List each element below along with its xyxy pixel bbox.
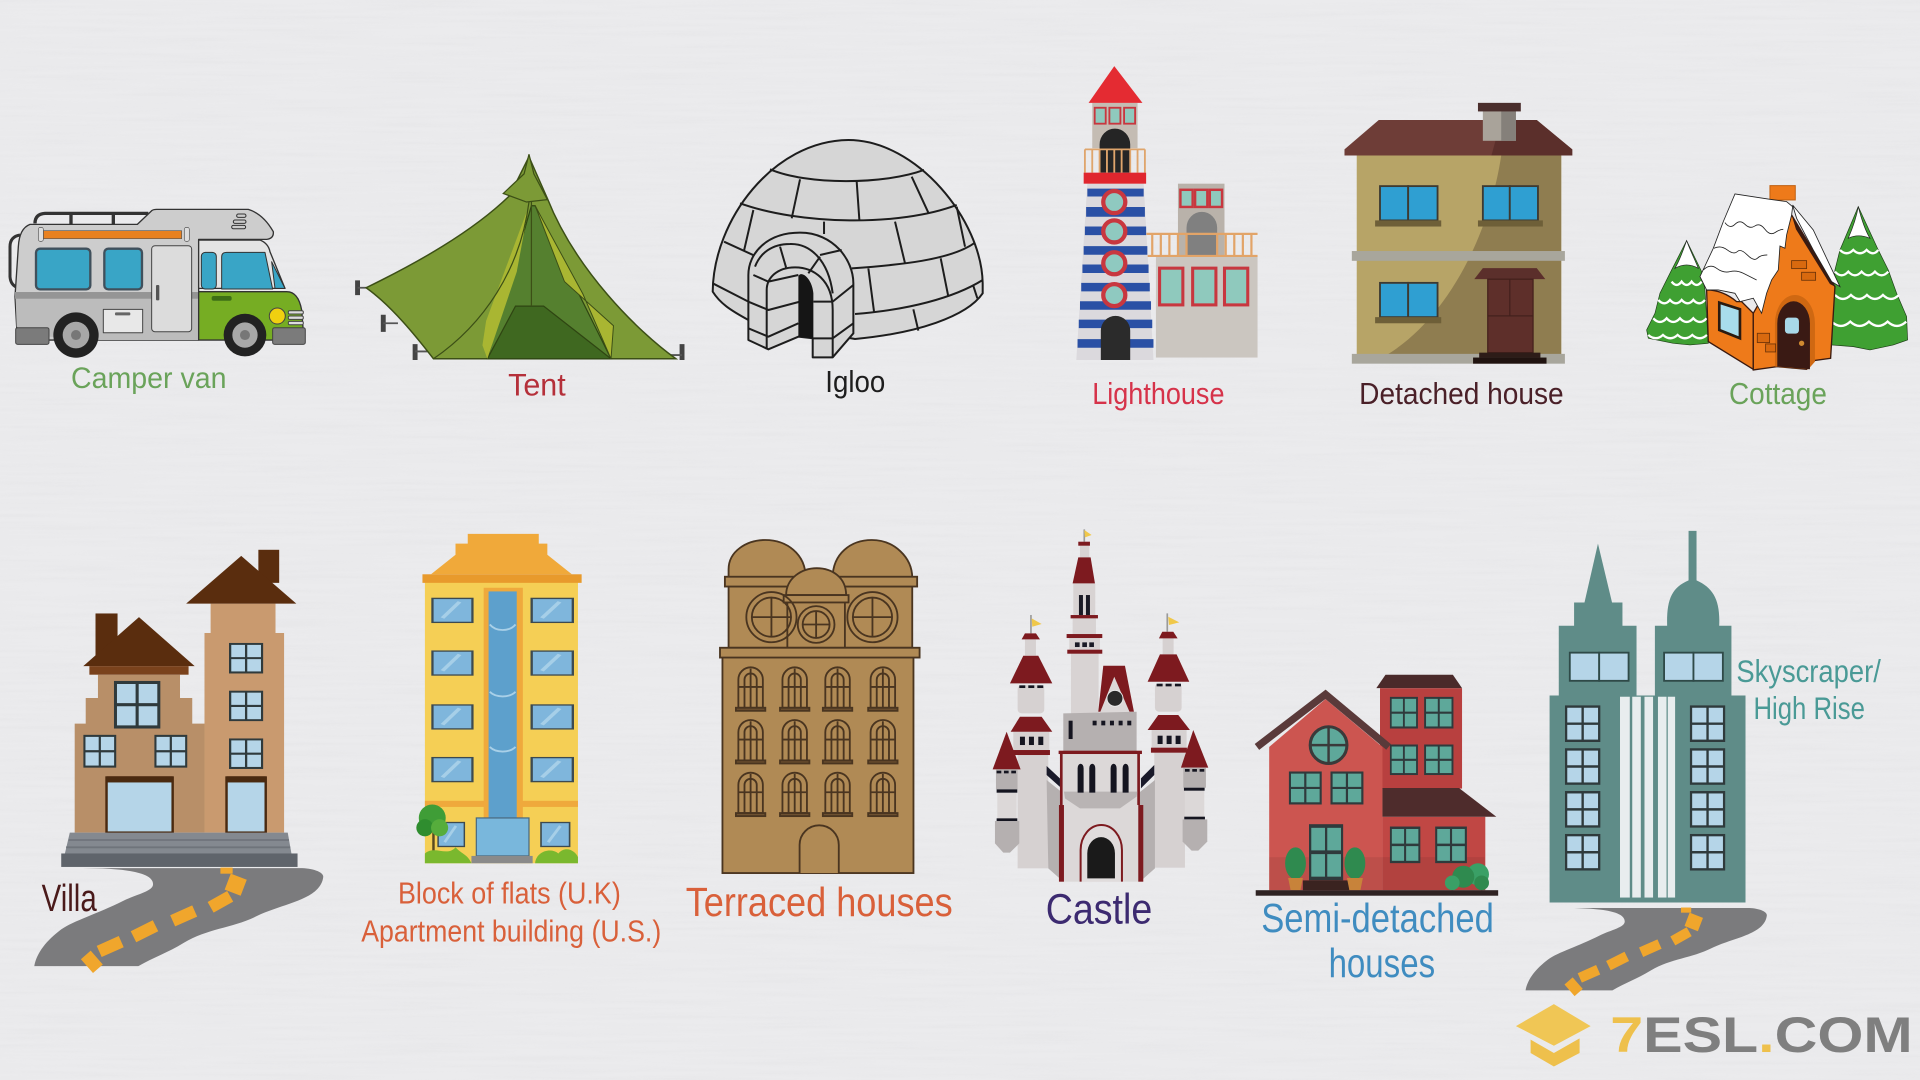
label: cottage: Cottage	[1729, 377, 1827, 411]
icon: castle	[993, 529, 1208, 882]
icon: camper van	[10, 209, 305, 358]
label: detached house: Detached house	[1359, 377, 1564, 411]
label: terraced houses: Terraced houses	[686, 879, 953, 925]
icon: lighthouse	[1076, 66, 1258, 360]
label: semi-detached houses: houses	[1329, 940, 1435, 986]
icon: terraced houses	[720, 540, 920, 873]
label: semi-detached houses: Semi-detached	[1261, 895, 1494, 941]
panel: detached house	[1344, 103, 1572, 411]
icon: graduation cap	[1516, 1004, 1591, 1067]
label: block of flats: Block of flats (U.K)	[398, 877, 621, 911]
panel: tent	[358, 154, 682, 403]
label: block of flats	[361, 877, 661, 949]
icon: skyscraper	[1526, 531, 1767, 990]
panel: skyscraper	[1526, 531, 1881, 990]
label: semi-detached houses	[1261, 895, 1494, 986]
panel: semi-detached houses	[1256, 675, 1498, 986]
panel: block of flats	[361, 534, 661, 949]
wordmark: 7ESL .COM	[1610, 1007, 1913, 1063]
panel: castle	[993, 529, 1208, 933]
logo: 7ESL.COM	[1516, 1004, 1913, 1067]
panel: terraced houses	[686, 540, 953, 925]
label: igloo: Igloo	[825, 365, 885, 399]
label: villa: Villa	[42, 878, 97, 920]
icon: tent	[358, 154, 682, 360]
panel: igloo	[713, 140, 983, 399]
icon: semi-detached houses	[1256, 675, 1498, 896]
label: skyscraper: High Rise	[1753, 690, 1865, 726]
label: lighthouse: Lighthouse	[1092, 377, 1224, 411]
label: camper van: Camper van	[71, 362, 227, 395]
label: castle: Castle	[1046, 885, 1152, 933]
label: skyscraper: Skyscraper/	[1736, 653, 1881, 689]
panel: camper van	[10, 209, 305, 395]
panel: cottage	[1647, 186, 1908, 411]
label: tent: Tent	[508, 367, 566, 403]
label: skyscraper	[1736, 653, 1881, 726]
panel: villa	[34, 550, 323, 966]
icon: block of flats	[416, 534, 582, 863]
label: block of flats: Apartment building (U.S.)	[361, 915, 661, 949]
icon: villa building	[34, 550, 323, 966]
panel: lighthouse	[1076, 66, 1258, 411]
icon: cottage	[1647, 186, 1908, 370]
icon: detached house	[1344, 103, 1572, 364]
icon: igloo	[713, 140, 983, 357]
